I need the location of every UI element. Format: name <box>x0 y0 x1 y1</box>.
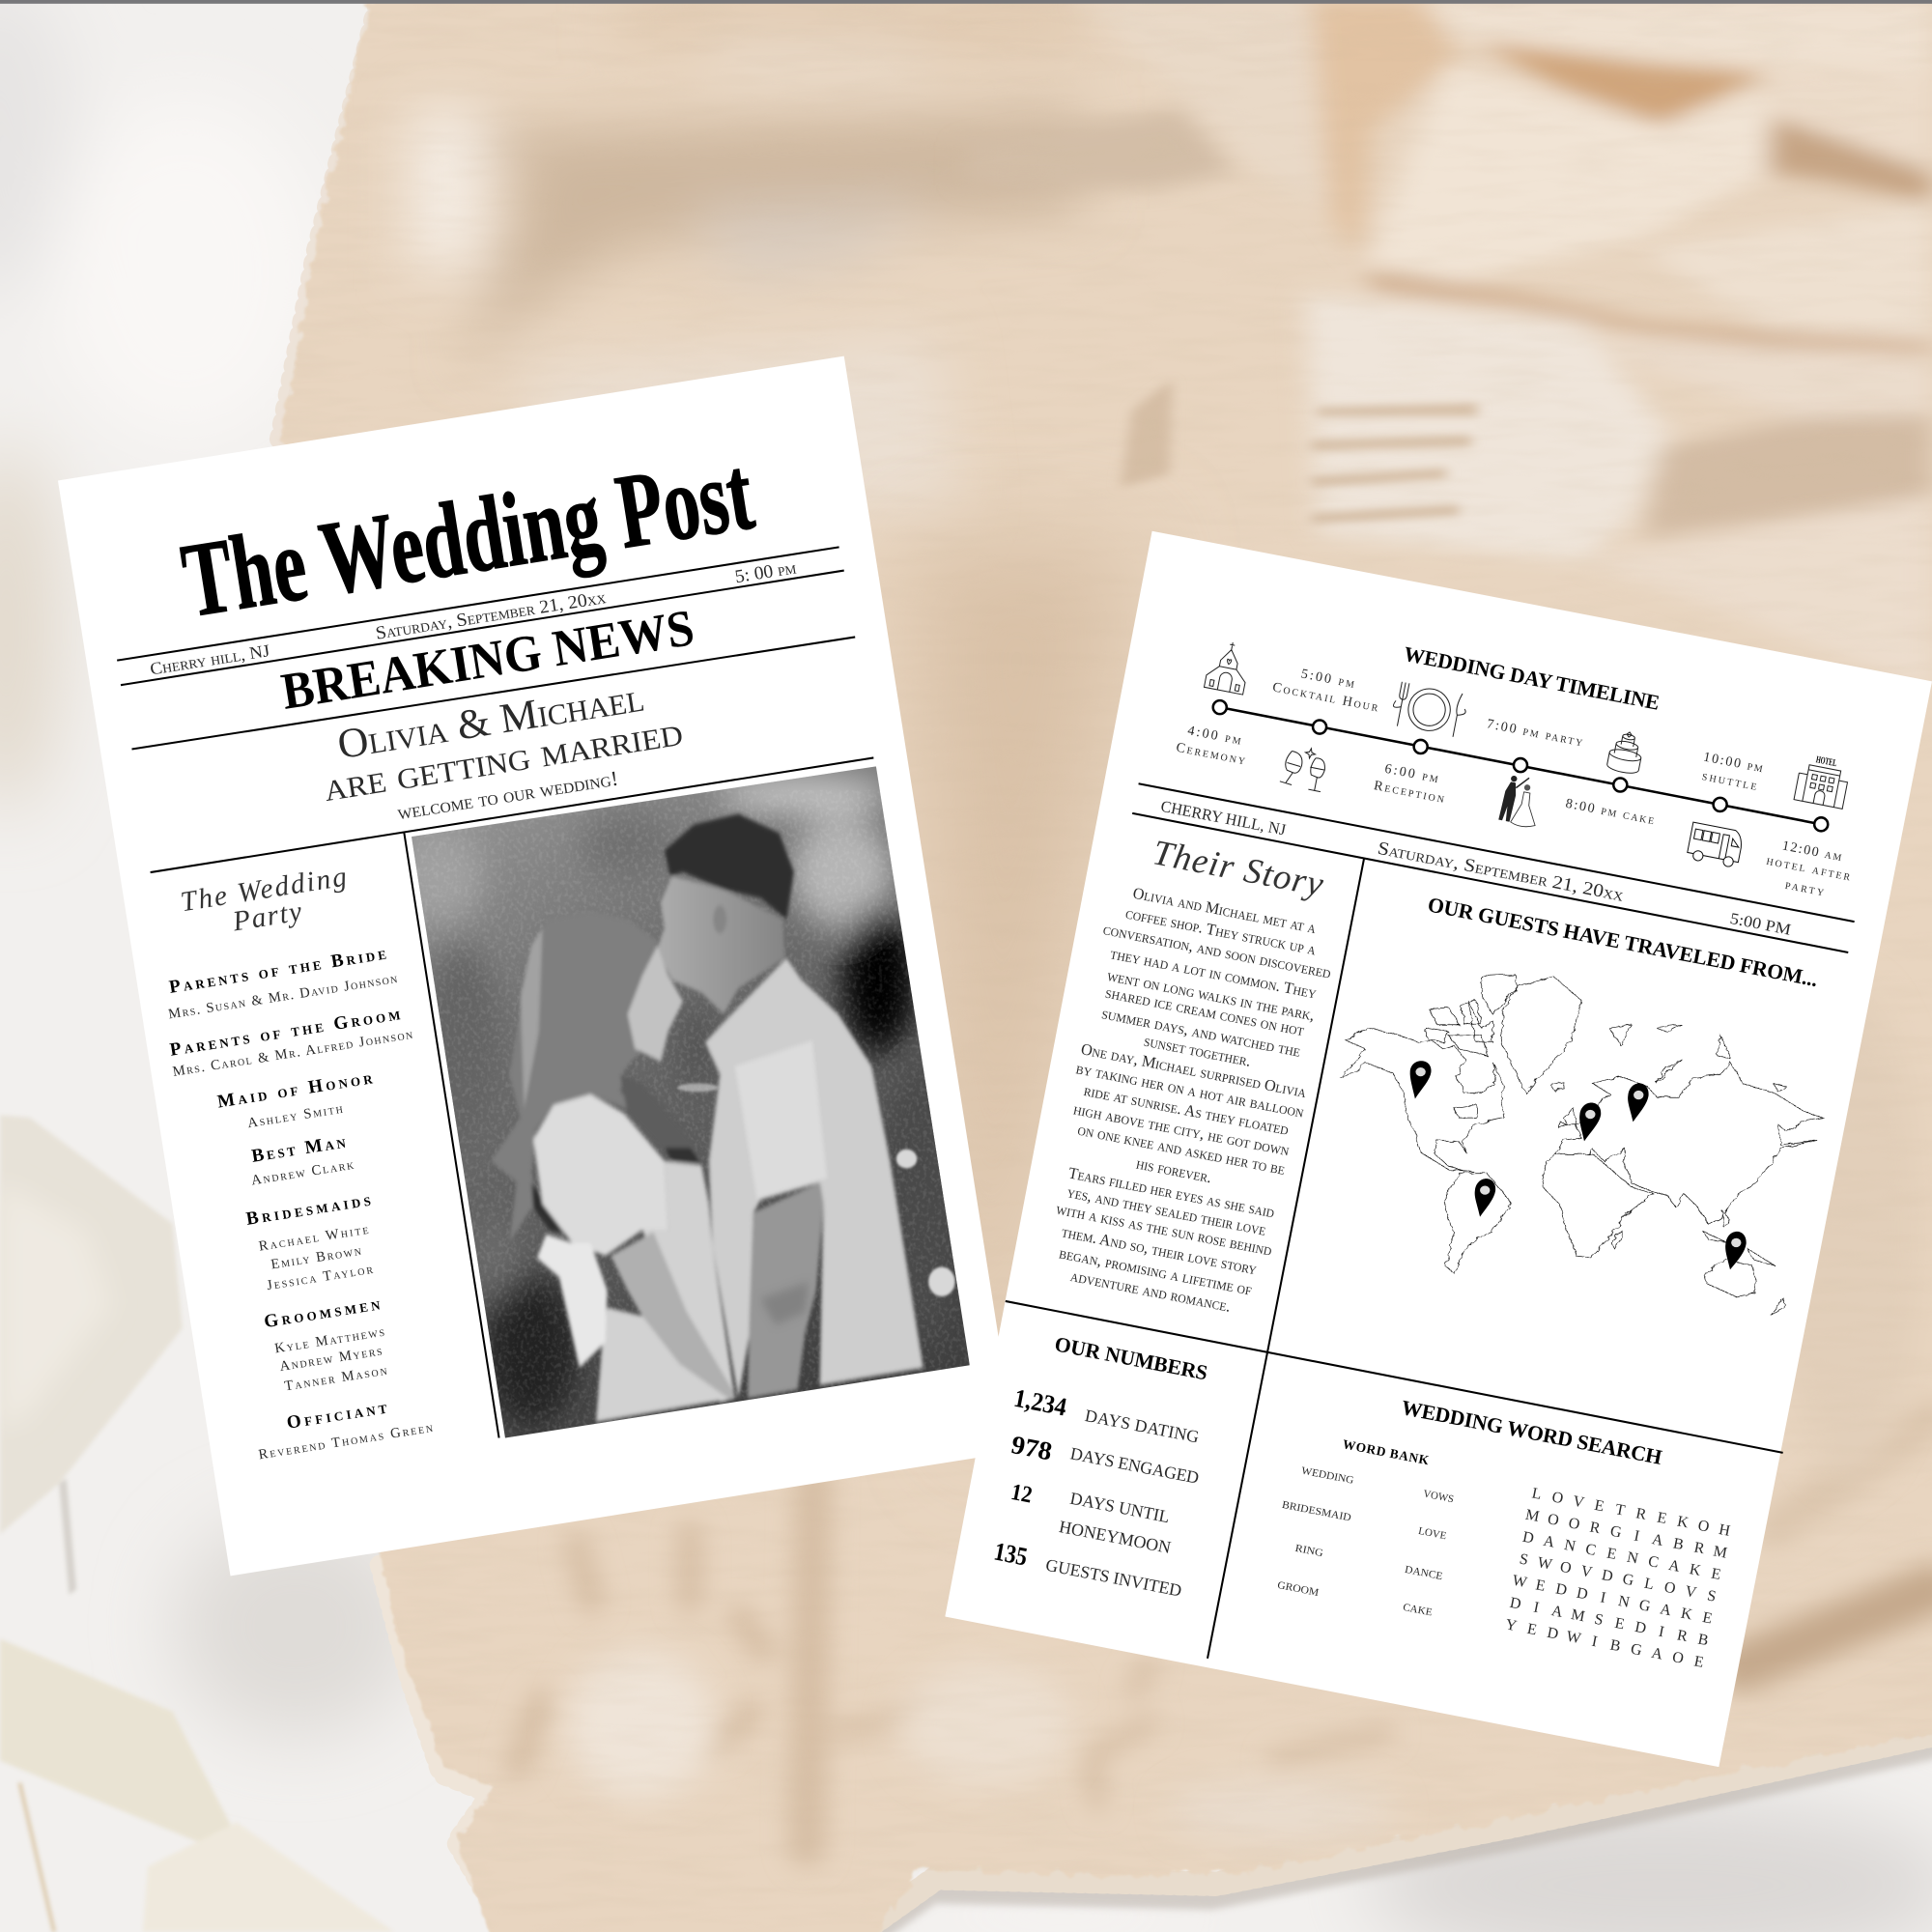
neckline <box>665 1148 701 1163</box>
fabric shading: lower cloth <box>518 1417 1932 1848</box>
timeline labels: shuttle <box>1701 768 1758 794</box>
word search grid <box>1504 1485 1732 1671</box>
couple figures <box>491 813 923 1422</box>
word bank <box>1276 1465 1455 1619</box>
timeline labels: 12:00 am <box>1781 838 1843 865</box>
wedding party list: Bridesmaids <box>244 1190 372 1230</box>
word search grid: DIAMSEDIRB <box>1508 1595 1710 1649</box>
icon: wedding cake <box>1606 729 1645 775</box>
story text <box>1055 884 1333 1316</box>
panel: our numbers: 1,234 <box>1011 1383 1069 1422</box>
story text: high above the city, he got down <box>1072 1099 1292 1159</box>
timeline labels: party <box>1784 877 1826 899</box>
wedding party list: Mrs. Carol & Mr. Alfred Johnson <box>172 1027 413 1080</box>
story text: them. And so, their love story <box>1060 1222 1259 1278</box>
dateline: date: Saturday, September 21, 20xx <box>374 587 608 644</box>
woman arm <box>611 1232 735 1401</box>
timeline labels: 7:00 pm party <box>1486 716 1584 750</box>
word search grid: WEDDINGAKE <box>1511 1573 1714 1627</box>
welcome line: welcome to our wedding! <box>396 767 620 824</box>
word search grid: SWOVDGLOVS <box>1519 1551 1718 1605</box>
panel: our numbers: 135 <box>992 1537 1030 1572</box>
wedding party list: Jessica Taylor <box>266 1262 374 1293</box>
wedding party list: Tanner Mason <box>283 1363 388 1394</box>
word bank: CAKE <box>1402 1602 1434 1619</box>
wedding party list: Mrs. Susan & Mr. David Johnson <box>167 971 398 1022</box>
icon: wine glasses <box>1279 744 1328 792</box>
photo background tones <box>395 780 968 1429</box>
icon: hotel <box>1794 752 1852 809</box>
story text: by taking her on a hot air balloon <box>1074 1059 1306 1122</box>
photo: couple embracing in black and white <box>394 752 985 1454</box>
dateline: time: 5: 00 pm <box>733 557 798 587</box>
icon: shuttle bus <box>1687 822 1744 868</box>
panel: our numbers: GUESTS INVITED <box>1044 1555 1183 1601</box>
foliage highlights <box>417 790 971 1437</box>
word search grid: LOVETREKOH <box>1530 1485 1732 1540</box>
wedding party list: Parents of the Groom <box>168 1004 402 1061</box>
story text: sunset together. <box>1143 1032 1252 1070</box>
wedding party list: Officiant <box>285 1398 388 1434</box>
timeline labels: 8:00 pm cake <box>1564 796 1656 828</box>
column and section dividers <box>1006 859 1783 1659</box>
story text: Olivia and Michael met at a <box>1131 884 1318 937</box>
story text: One day, Michael surprised Olivia <box>1079 1039 1308 1101</box>
panel: our numbers: 978 <box>1009 1430 1055 1466</box>
icon: church <box>1204 639 1252 695</box>
story text: adventure and romance. <box>1069 1266 1233 1316</box>
map pins <box>1410 1061 1747 1269</box>
story text: went on long walks in the park, <box>1106 966 1316 1024</box>
story text: ride at sunrise. As they floated <box>1082 1081 1291 1139</box>
timeline labels: Cocktail Hour <box>1271 679 1379 715</box>
man ear <box>713 906 726 933</box>
headline: couple names: Olivia & Michael <box>334 674 647 768</box>
story text: conversation, and soon discovered <box>1101 920 1333 982</box>
ribbon bottom left <box>0 1115 394 1932</box>
wedding party list: Groomsmen <box>263 1293 382 1332</box>
dateline: location: Cherry hill, NJ <box>149 640 271 679</box>
wedding party list: Parents of the Bride <box>168 944 387 998</box>
heading: Wedding Day Timeline: WEDDING DAY TIMELINE <box>1402 642 1662 715</box>
woman dress sleeve <box>533 1094 668 1256</box>
world map with location pins <box>1340 975 1823 1315</box>
icon: plate and cutlery <box>1390 681 1469 738</box>
wedding party list: Kyle Matthews <box>273 1324 385 1357</box>
timeline labels: hotel after <box>1765 853 1852 884</box>
panel: our numbers: DAYS UNTIL <box>1068 1489 1172 1526</box>
man hair <box>665 813 794 920</box>
story text: his forever. <box>1135 1154 1213 1186</box>
story text: began, promising a lifetime of <box>1058 1243 1254 1299</box>
panel: our numbers: OUR NUMBERS <box>1053 1332 1209 1385</box>
story text: with a kiss as the sun rose behind <box>1055 1200 1274 1260</box>
woman dress bodice <box>642 1161 735 1403</box>
dateline: date: Saturday, September 21, 20xx <box>1376 838 1626 906</box>
masthead rules <box>117 547 873 872</box>
column divider <box>404 833 499 1438</box>
word search grid: DANCENCAKE <box>1521 1529 1722 1583</box>
top edge line <box>0 0 1932 4</box>
fabric folds: upper right <box>1077 4 1932 678</box>
wedding party list: Reverend Thomas Green <box>257 1420 434 1463</box>
fabric shading: upper left <box>412 0 1084 518</box>
headline: are getting married: are getting married <box>321 708 686 810</box>
woman skirt <box>596 1308 735 1422</box>
map coastlines <box>1340 975 1823 1315</box>
word bank: WEDDING <box>1300 1465 1355 1487</box>
word bank: RING <box>1294 1543 1324 1559</box>
panel: wedding word search: WEDDING WORD SEARCH <box>1400 1396 1664 1469</box>
panel: our numbers: DAYS ENGAGED <box>1068 1443 1201 1488</box>
woman hair <box>491 911 701 1243</box>
story text: yes, and they sealed their love <box>1065 1182 1267 1239</box>
panel: our numbers <box>992 1332 1209 1601</box>
timeline labels <box>1175 666 1852 899</box>
timeline: line and stops <box>1213 700 1828 831</box>
panel: our numbers: HONEYMOON <box>1058 1517 1173 1557</box>
icon: dancing couple <box>1498 774 1544 829</box>
page: front of newspaper programme <box>58 356 1016 1576</box>
wedding party list: Andrew Clark <box>250 1157 355 1188</box>
word bank: LOVE <box>1417 1525 1448 1542</box>
story text: shared ice cream cones on hot <box>1104 983 1306 1039</box>
timeline labels: Ceremony <box>1175 740 1247 768</box>
dateline: time: 5:00 PM <box>1728 909 1793 939</box>
timeline labels: 4:00 pm <box>1186 723 1242 749</box>
word bank: VOWS <box>1422 1488 1455 1505</box>
heading: The Wedding Party: The Wedding <box>179 862 349 918</box>
panel: wedding word search <box>1276 1396 1732 1671</box>
page: back of newspaper programme <box>945 531 1932 1767</box>
timeline labels: 6:00 pm <box>1383 761 1439 786</box>
panel: our numbers: 12 <box>1009 1479 1035 1509</box>
word search grid: MOORGIABRM <box>1524 1507 1728 1562</box>
timeline labels: Reception <box>1373 778 1446 807</box>
story text: summer days, and watched the <box>1100 1004 1302 1061</box>
story text: coffee shop. They struck up a <box>1124 904 1318 958</box>
dateline: location: CHERRY HILL, NJ <box>1159 797 1288 839</box>
woman face <box>628 946 683 1062</box>
wedding party list: Ashley Smith <box>246 1101 344 1131</box>
wedding party list: Andrew Myers <box>278 1343 384 1375</box>
masthead: The Wedding Post: The Wedding Post <box>175 434 760 639</box>
wedding party list <box>167 944 434 1463</box>
story text: they had a lot in common. They <box>1109 944 1319 1002</box>
panel: wedding word search: WORD BANK <box>1342 1436 1431 1467</box>
timeline labels: 5:00 pm <box>1299 666 1356 692</box>
heading: Their Story: Their Story <box>1150 832 1327 904</box>
heading: The Wedding Party: Party <box>230 895 304 938</box>
man shirt <box>705 958 923 1398</box>
wedding party list: Rachael White <box>258 1222 370 1255</box>
word bank: BRIDESMAID <box>1281 1499 1352 1524</box>
panel: our numbers: DAYS DATING <box>1084 1406 1201 1447</box>
word bank: GROOM <box>1276 1579 1321 1599</box>
icon: hotel: HOTEL <box>1815 754 1837 769</box>
wedding party list: Best Man <box>250 1132 348 1167</box>
timeline labels: 10:00 pm <box>1702 750 1764 776</box>
header rules <box>1132 783 1855 952</box>
wedding party list: Maid of Honor <box>216 1067 375 1113</box>
story text: on one knee and asked her to be <box>1076 1121 1287 1179</box>
man arm <box>748 1182 823 1398</box>
heading: Our guests have traveled from: OUR GUESTS HAVE TRAVELED FROM... <box>1426 893 1820 991</box>
word bank: DANCE <box>1404 1564 1444 1582</box>
wedding party list: Emily Brown <box>270 1243 362 1272</box>
bow <box>537 1235 608 1368</box>
word search grid: YEDWIBGAOE <box>1504 1616 1705 1671</box>
story text: Tears filled her eyes as she said <box>1067 1163 1276 1221</box>
headline: Breaking News: BREAKING NEWS <box>277 598 697 721</box>
man face and neck <box>657 876 784 1014</box>
